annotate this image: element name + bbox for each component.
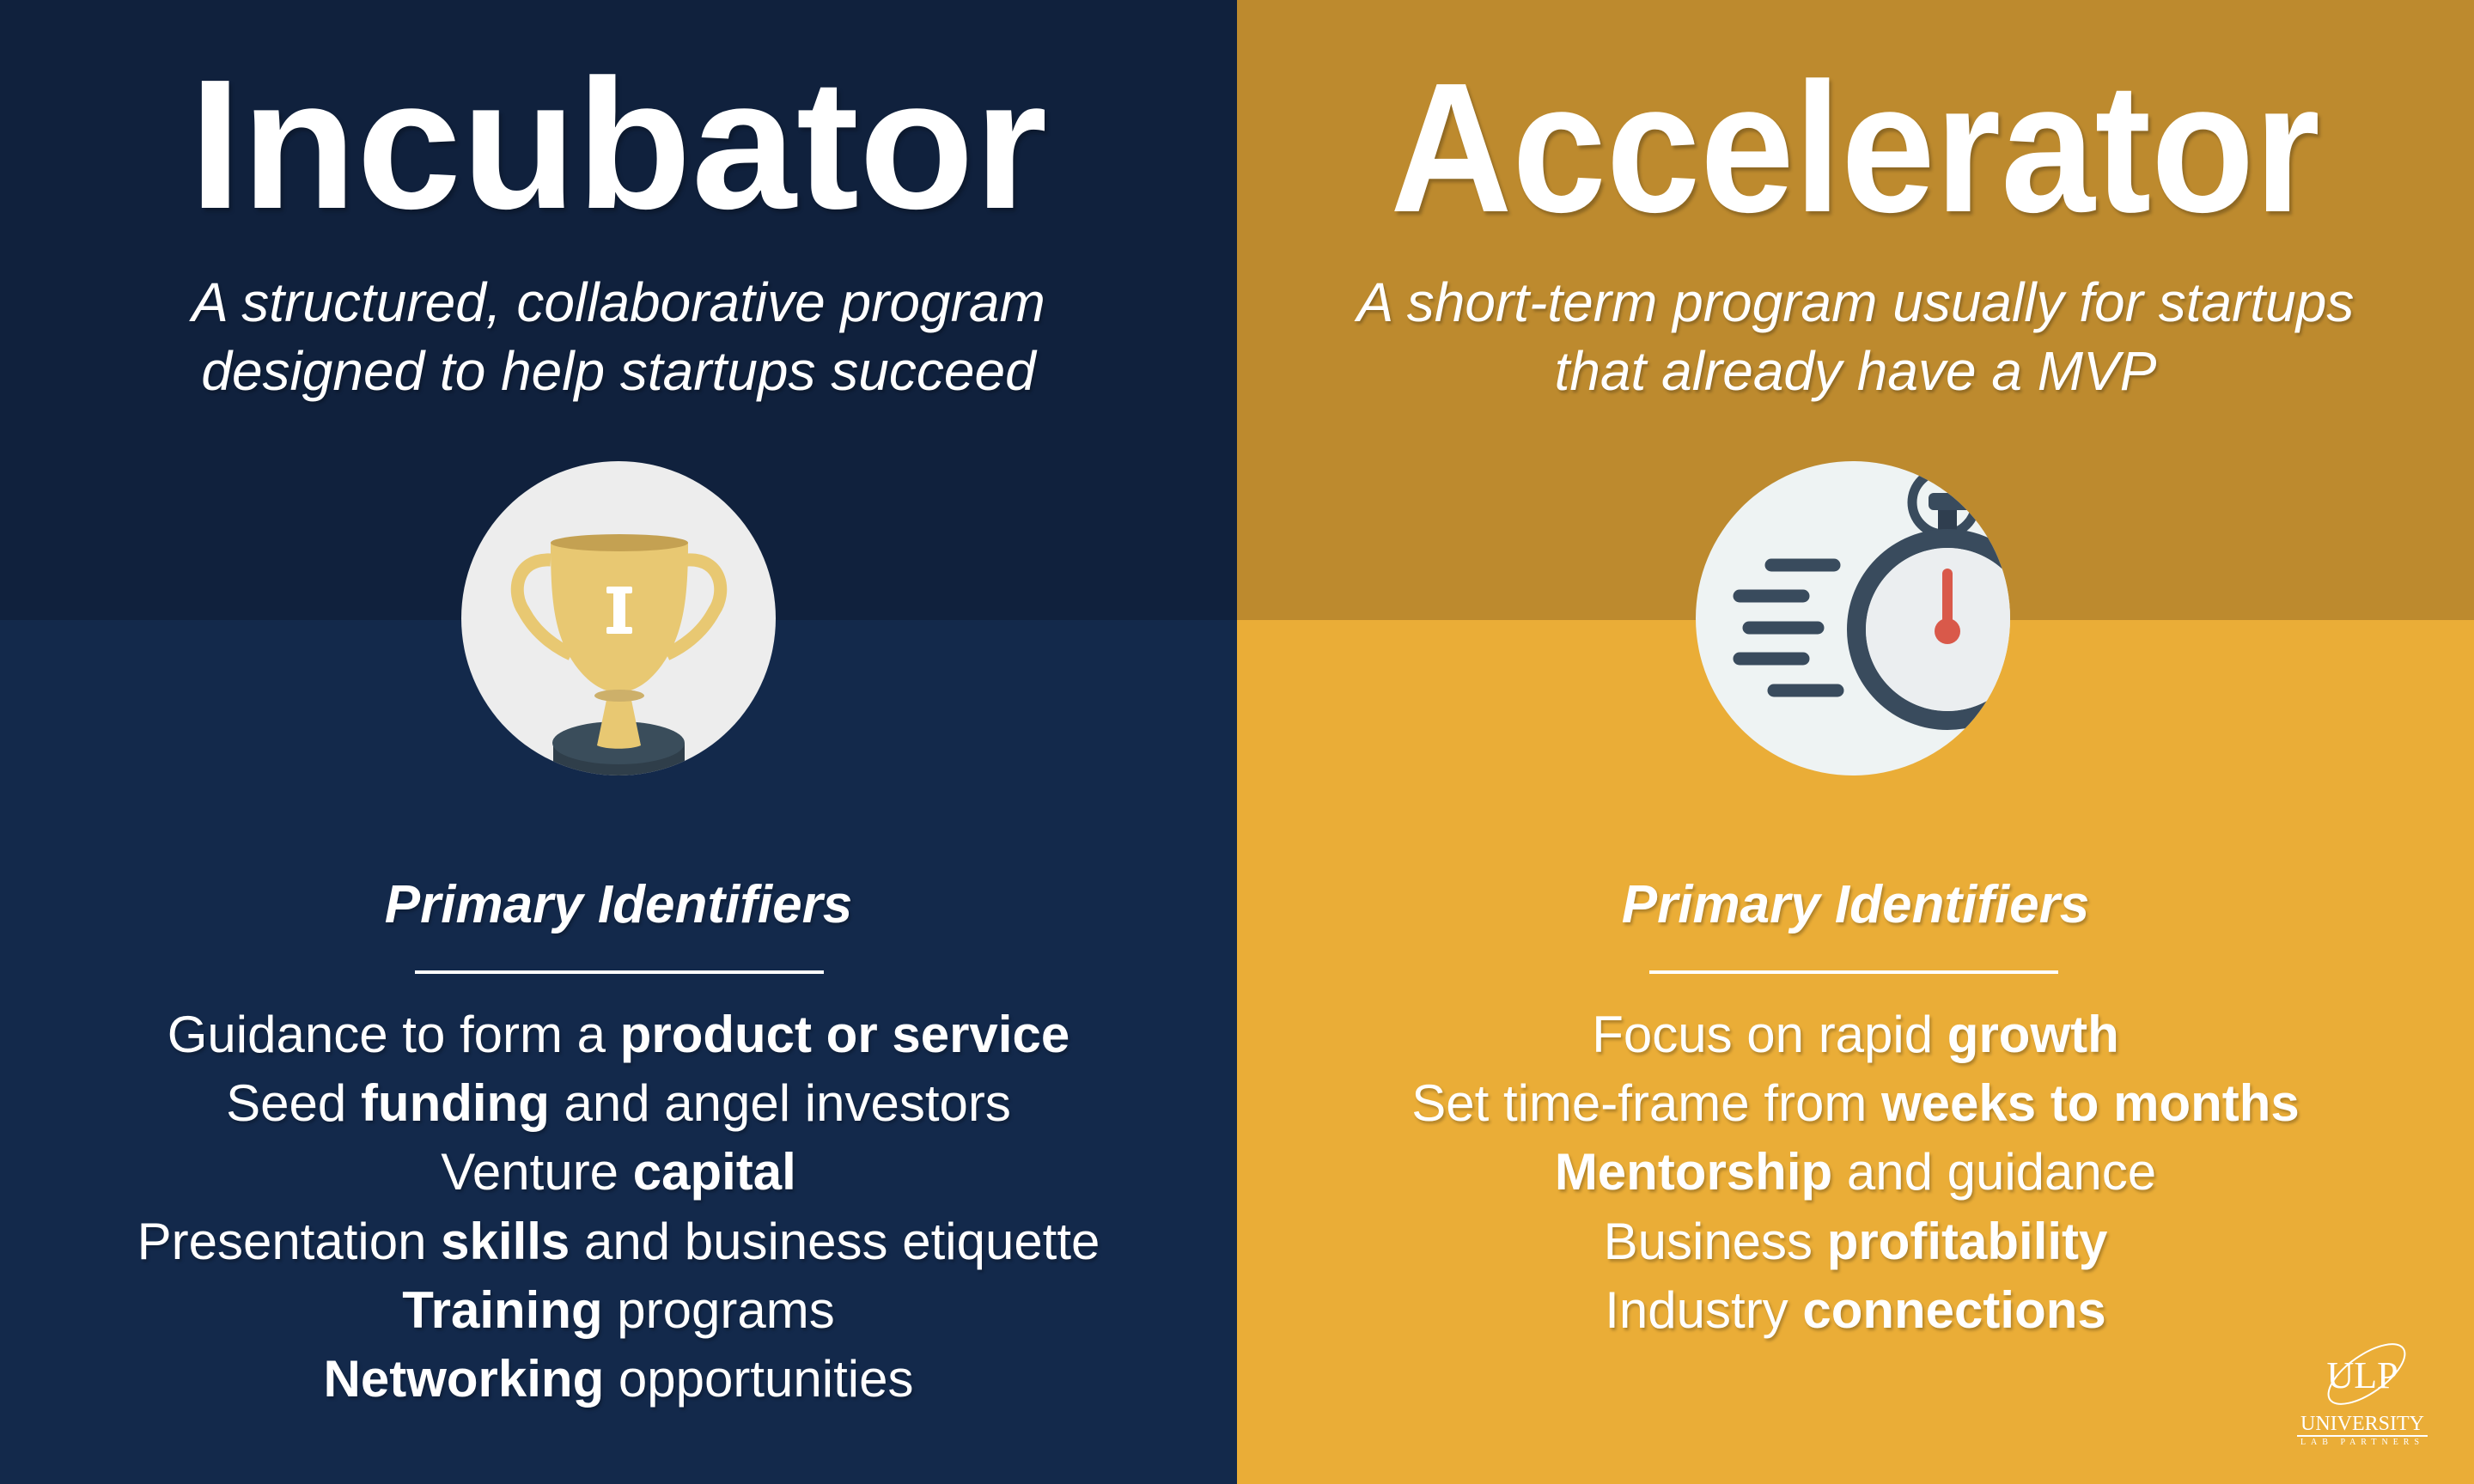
list: incubator identifiers: Networking opportunities	[324, 1350, 913, 1408]
subtitle: accelerator	[1354, 271, 2355, 405]
heading: incubator primary identifiers: Primary Identifiers	[385, 875, 852, 934]
title: Accelerator: Accelerator	[1391, 44, 2320, 251]
list: incubator identifiers: Guidance to form a product or service	[168, 1006, 1069, 1063]
panel: accelerator top	[1237, 0, 2474, 620]
list: accelerator identifiers: Business profitability	[1604, 1213, 2107, 1270]
list: accelerator identifiers: Mentorship and guidance	[1555, 1143, 2156, 1201]
subtitle: accelerator: A short-term program usually for startups	[1357, 271, 2354, 333]
subtitle: accelerator: that already have a MVP	[1555, 340, 2156, 402]
logo: University Lab Partners	[2297, 1343, 2428, 1447]
list: accelerator identifiers	[1411, 1006, 2300, 1342]
list: accelerator identifiers: Focus on rapid growth	[1592, 1006, 2119, 1063]
subtitle: incubator	[189, 271, 1045, 404]
title: Incubator: Incubator	[189, 40, 1048, 247]
heading: accelerator primary identifiers: Primary Identifiers	[1622, 875, 2089, 934]
logo: University Lab Partners: ULP	[2326, 1354, 2398, 1396]
logo: University Lab Partners: UNIVERSITY	[2300, 1413, 2424, 1435]
subtitle: incubator: designed to help startups succeed	[201, 340, 1036, 402]
list: incubator identifiers: Venture capital	[441, 1143, 796, 1201]
list: incubator identifiers: Training programs	[402, 1281, 835, 1339]
logo: University Lab Partners: LAB PARTNERS	[2300, 1438, 2424, 1447]
subtitle: incubator: A structured, collaborative program	[192, 271, 1045, 333]
list: incubator identifiers: Presentation skills and business etiquette	[137, 1213, 1100, 1270]
panel: incubator bottom	[0, 620, 1237, 1484]
list: incubator identifiers: Seed funding and angel investors	[226, 1074, 1011, 1132]
list: incubator identifiers	[137, 1006, 1100, 1410]
icon: trophy	[461, 461, 776, 775]
list: accelerator identifiers: Set time-frame from weeks to months	[1411, 1074, 2300, 1132]
list: accelerator identifiers: Industry connections	[1605, 1281, 2106, 1339]
panel: incubator top	[0, 0, 1237, 620]
icon: stopwatch	[1696, 461, 2010, 775]
panel: accelerator bottom	[1237, 620, 2474, 1484]
